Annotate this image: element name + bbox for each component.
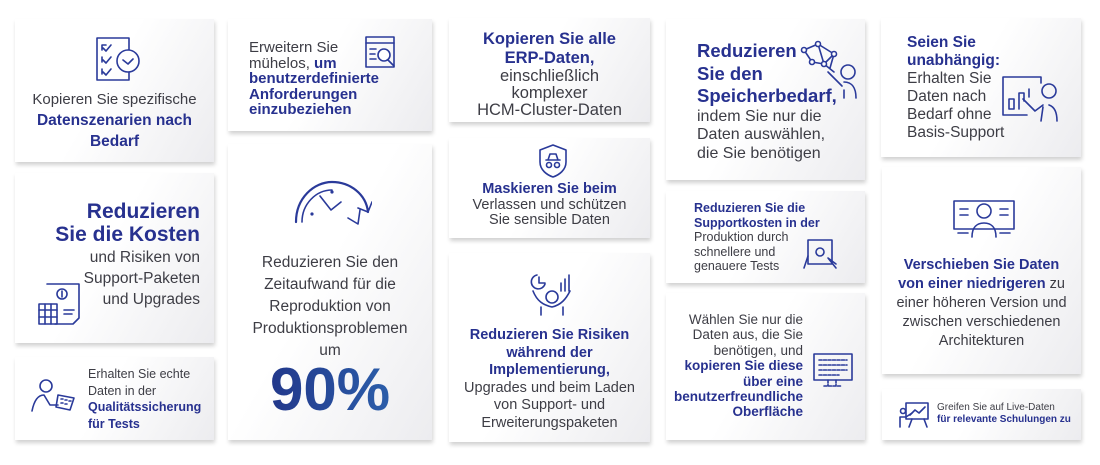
text: Verschieben Sie Daten [904,257,1059,273]
icon: person charts [530,274,571,316]
text: Basis-Support [907,124,1004,141]
panel: QA data [15,357,214,440]
text [697,40,837,162]
text: benutzerdefinierte [249,70,379,87]
text: Datenszenarien nach [37,112,192,129]
text: Zeitaufwand für die [264,276,396,293]
text: Daten in der [88,384,156,398]
text: kopieren Sie diese [684,358,803,373]
text: Reproduktion von [269,298,391,315]
panel: copy specific scenarios [15,19,214,162]
text: und Risiken von [90,249,200,266]
text: komplexer [511,84,588,102]
text: Supportkosten in der [694,216,820,230]
text: indem Sie nur die [697,108,822,124]
text: Kopieren Sie spezifische [32,91,197,108]
icon: checklist clock [96,37,140,81]
text [477,30,622,119]
text: Produktionsproblemen [252,320,408,337]
text: einzubeziehen [249,101,352,118]
text: schnellere und [694,245,775,259]
panel: reduce risks [449,253,650,442]
panel: migrate versions [882,167,1081,374]
text [896,257,1067,349]
text: um [319,342,341,359]
text: Daten aus, die Sie [693,327,803,342]
text: Oberfläche [732,404,803,419]
text [88,367,201,430]
text: Qualitätssicherung [88,400,201,414]
text [32,91,197,150]
text: von Support- und [494,397,605,413]
text: Architekturen [939,333,1024,349]
text: Anforderungen [249,86,357,102]
text [907,34,1004,141]
text [464,327,635,430]
text [252,254,408,359]
text: Speicherbedarf, [697,85,837,106]
panel: training [882,389,1081,440]
big number 90%: 90% [270,356,390,423]
text: Reduzieren [87,200,200,223]
text: Erhalten Sie echte [88,367,190,381]
text: Erweiterungspaketen [481,414,618,430]
text: benötigen, und [714,343,803,358]
text: Reduzieren Sie den [262,254,398,271]
icon: presenter chart [1002,76,1058,122]
text: benutzerfreundliche [674,389,803,404]
icon: person laptop [31,379,75,412]
icon: presenter board [899,402,929,428]
big number 90% [228,358,432,422]
text: Erweitern Sie [249,39,338,56]
text [937,402,1071,425]
text: Support-Paketen [84,270,200,287]
text: über eine [743,374,803,389]
panel: masking [449,138,650,238]
text: Produktion durch [694,230,789,244]
icon: network person [800,40,857,99]
icon: invoice calculator [38,283,80,325]
text: Seien Sie [907,34,976,51]
text: Bedarf ohne [907,106,991,123]
text: Sie den [697,62,763,84]
text: Kopieren Sie alle [483,30,616,48]
text: Daten nach [907,88,986,105]
text: ERP-Daten, [505,49,594,67]
text: Reduzieren Sie Risiken [470,327,629,343]
text: Sie sensible Daten [489,212,610,228]
text: Reduzieren Sie die [694,201,805,215]
icon: tablet hands [803,239,837,269]
text: Sie die Kosten [55,223,200,246]
icon: monitor [813,353,853,387]
text: während der [506,344,593,360]
panel: copy all ERP [449,18,650,122]
text: Wählen Sie nur die [689,312,803,327]
panel: extend requirements [228,19,432,131]
text: Daten auswählen, [697,126,825,143]
text: Upgrades und beim Laden [464,380,635,396]
text: zwischen verschiedenen [902,314,1060,330]
panel: independent [881,18,1081,157]
icon: monitor person [953,200,1015,238]
panel: support costs [666,191,865,283]
text [674,312,803,419]
text [55,200,200,308]
panel: choose data UI [666,293,865,440]
text [694,201,820,273]
icon: search window [365,36,395,68]
text: Greifen Sie auf Live-Daten [937,402,1055,413]
icon: clock arrow [294,180,372,225]
icon: shield mask [539,144,567,178]
text: für Tests [88,416,140,430]
text: Implementierung, [489,362,610,378]
text: unabhängig: [907,52,1000,69]
text: einer höheren Version und [896,295,1067,311]
text: Verlassen und schützen [473,196,626,212]
text: HCM-Cluster-Daten [477,101,622,119]
text [249,39,379,118]
panel: reduce storage [666,19,865,180]
text: Maskieren Sie beim [482,181,617,197]
text: für relevante Schulungen zu [937,414,1071,425]
text: einschließlich [500,67,599,85]
text: Erhalten Sie [907,70,991,87]
text: genauere Tests [694,259,779,273]
text [472,181,626,228]
panel: reduce costs [15,173,214,343]
text: die Sie benötigen [697,144,821,162]
panel: 90 percent [228,144,432,440]
text: von einer niedrigeren zu [898,276,1065,292]
text: Reduzieren [697,40,797,61]
text: mühelos, um [249,54,337,72]
text: und Upgrades [103,291,200,308]
text: Bedarf [90,133,139,150]
